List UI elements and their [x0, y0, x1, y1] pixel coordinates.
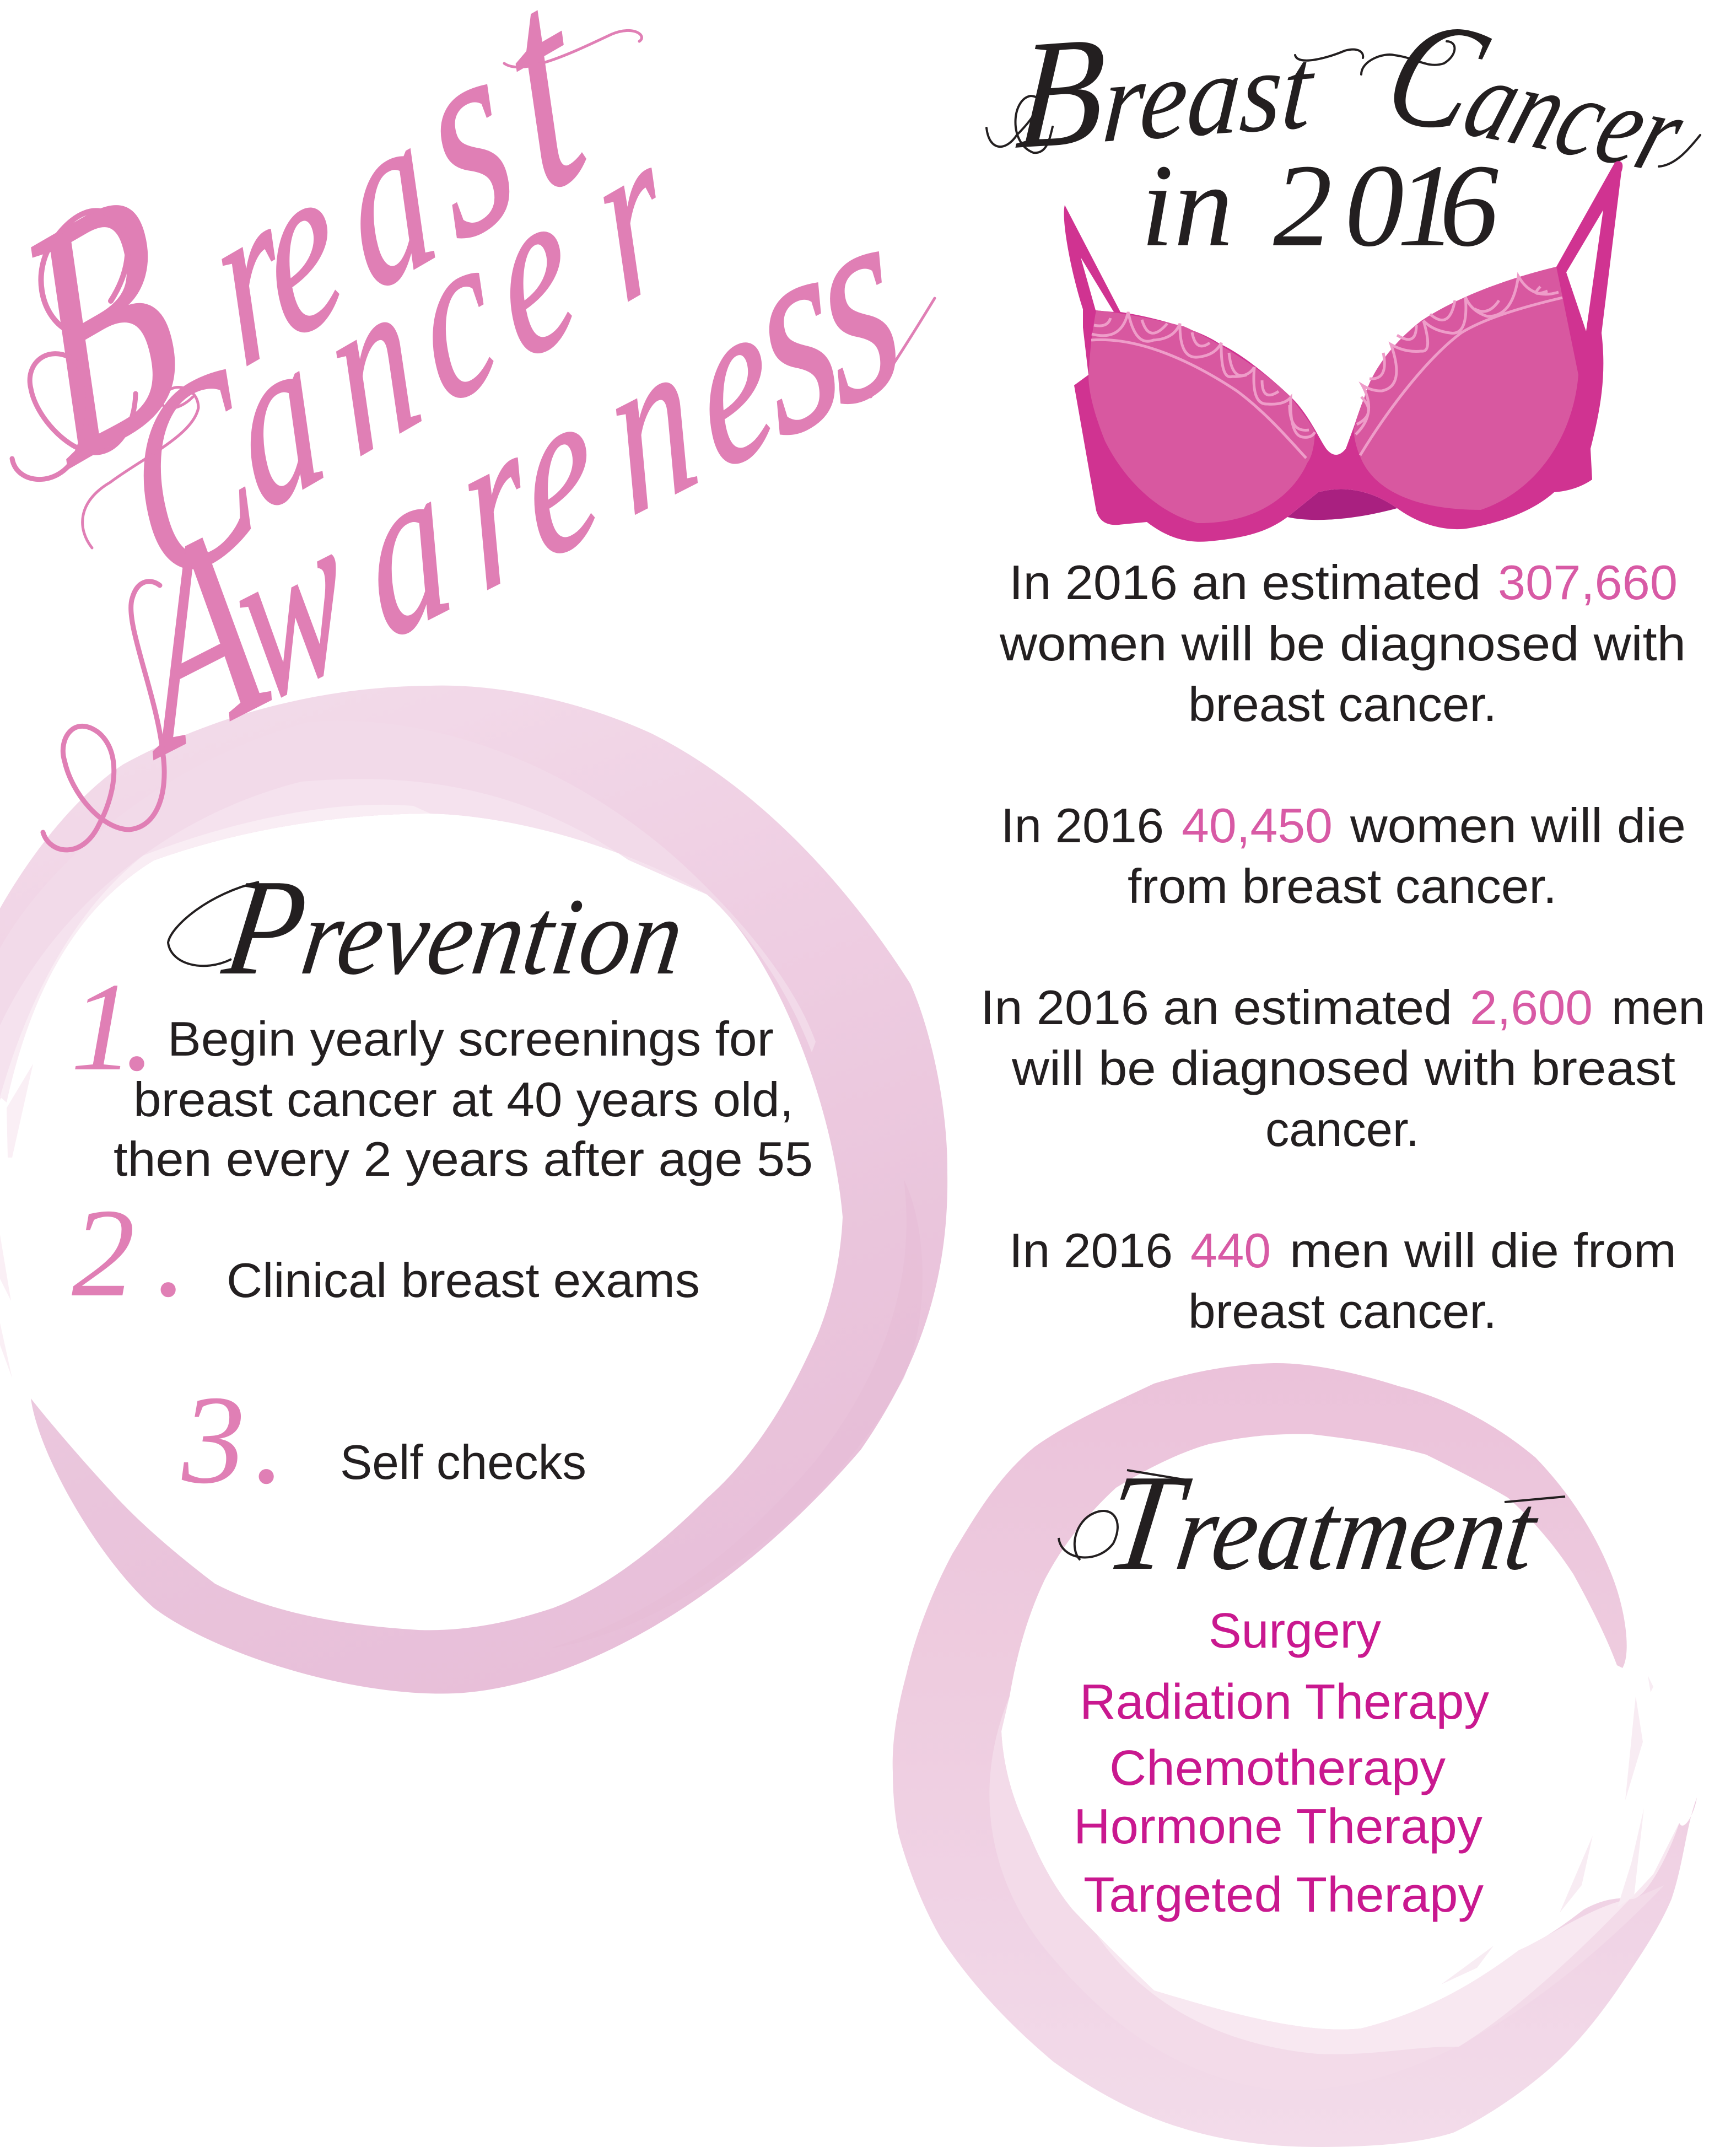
list: treatments: Targeted Therapy [1083, 1868, 1484, 1923]
stats: men deaths: In 2016 [1009, 1223, 1173, 1278]
list item 3 [181, 1369, 586, 1510]
text: yearly screenings [114, 1011, 813, 1186]
number: 440: 440 [1190, 1223, 1271, 1278]
list: treatments [1074, 1603, 1489, 1923]
text: yearly screenings: breast cancer at 40 years old, [133, 1072, 794, 1127]
stats: women deaths: In 2016 [1001, 798, 1164, 853]
stats: women deaths: women will die [1350, 798, 1686, 853]
stats: women deaths: from breast cancer. [1128, 859, 1557, 913]
stats: men diagnosed: will be diagnosed with breast [1011, 1041, 1675, 1095]
list item 1 [71, 956, 813, 1186]
stats: women diagnosed [999, 555, 1686, 731]
text: self checks: Self checks [340, 1435, 586, 1489]
stats: men deaths: men will die from [1290, 1223, 1676, 1278]
stats: men deaths: breast cancer. [1188, 1284, 1497, 1338]
number: 40,450: 40,450 [1182, 798, 1333, 853]
decorative title flourishes [12, 30, 935, 850]
bra left cup [1088, 310, 1315, 523]
numeral: 1: 1. [71, 956, 155, 1097]
number: 2,600: 2,600 [1470, 980, 1593, 1035]
numeral: 2: 2. [72, 1182, 187, 1323]
bra right cup [1354, 267, 1578, 510]
icon: pink bra [1064, 161, 1622, 542]
list: treatments: Chemotherapy [1109, 1741, 1446, 1796]
list item 2 [72, 1182, 700, 1323]
title word: Awareness: Awareness [101, 130, 923, 819]
decorative prevention flourish [168, 882, 259, 966]
bra back band shadow [1287, 489, 1397, 520]
decorative heading flourishes [986, 41, 1700, 166]
panel: treatment brush ring [893, 1363, 1697, 2147]
heading: Breast Cancer in 2016 [986, 0, 1711, 271]
text: clinical exams: Clinical breast exams [227, 1253, 700, 1307]
heading line: in 2016: in 2016 [1141, 139, 1499, 271]
stats: men diagnosed: cancer. [1265, 1102, 1419, 1156]
panel: prevention brush ring [0, 686, 947, 1694]
text: yearly screenings: Begin yearly screenings for [168, 1011, 774, 1066]
decorative treatment flourish [1059, 1470, 1565, 1560]
stats: men diagnosed: men [1611, 980, 1705, 1035]
bra lace trim [1091, 276, 1562, 458]
stats: women diagnosed: breast cancer. [1188, 677, 1497, 731]
stats: women deaths [1001, 798, 1686, 913]
stats: men deaths [1009, 1223, 1676, 1338]
number: 307,660: 307,660 [1498, 555, 1678, 610]
stats: women diagnosed: In 2016 an estimated [1009, 555, 1481, 610]
numeral: 3: 3. [181, 1369, 285, 1510]
heading word: Breast: Breast [1012, 0, 1321, 182]
title word: Cancer: Cancer [100, 66, 699, 644]
stats: men diagnosed [980, 980, 1705, 1156]
list: treatments: Hormone Therapy [1074, 1799, 1482, 1854]
heading: Treatment: Treatment [1098, 1446, 1549, 1599]
stats: men diagnosed: In 2016 an estimated [980, 980, 1452, 1035]
bra frame and straps [1064, 161, 1622, 542]
stats: women diagnosed: women will be diagnosed with [999, 616, 1686, 671]
title: Breast Cancer Awareness [0, 0, 935, 850]
list: treatments: Surgery [1209, 1603, 1381, 1659]
text: yearly screenings: then every 2 years after age 55 [114, 1132, 813, 1186]
heading: Prevention: Prevention [215, 851, 694, 1004]
list: treatments: Radiation Therapy [1080, 1675, 1489, 1730]
